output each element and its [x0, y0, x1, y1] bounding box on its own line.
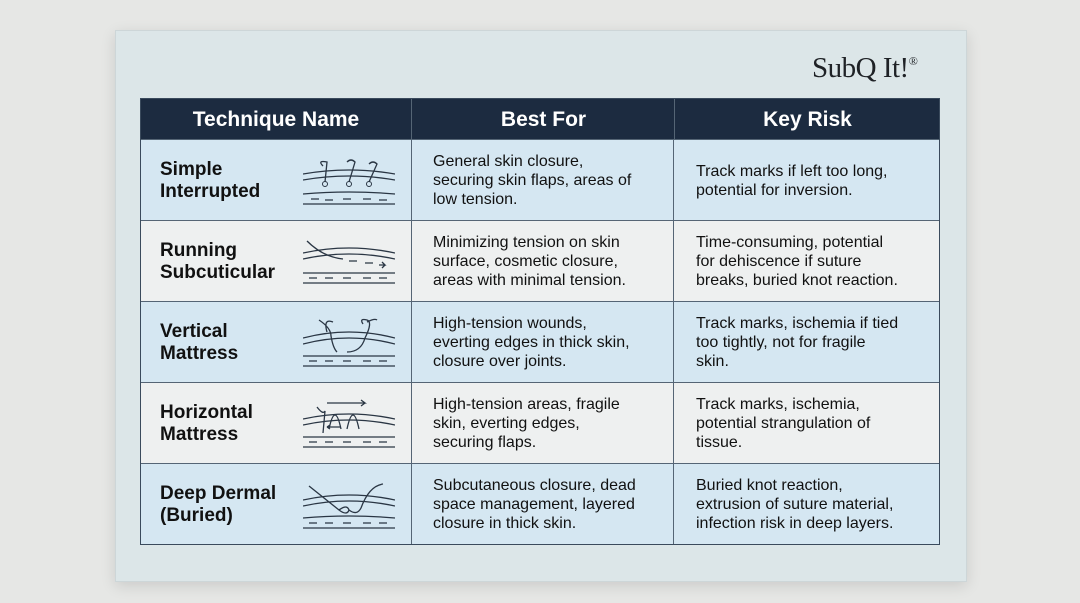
row: horizontal mattress: Mattress	[160, 424, 238, 444]
row: running subcuticular: Subcuticular	[160, 262, 275, 282]
icon: running subcuticular	[303, 240, 395, 284]
row: horizontal mattress: potential strangulation of	[696, 415, 870, 432]
header: best for: Best For	[501, 108, 586, 131]
row: deep dermal: Buried knot reaction,	[696, 477, 843, 494]
icon: deep dermal	[303, 483, 395, 529]
row: simple interrupted: securing skin flaps, areas of	[433, 172, 631, 189]
row: vertical mattress: skin.	[696, 353, 729, 370]
panel: glass board	[115, 30, 967, 582]
table	[140, 98, 940, 545]
row: horizontal mattress: Track marks, ischemia,	[696, 396, 860, 413]
row: vertical mattress: too tightly, not for fragile	[696, 334, 866, 351]
row: deep dermal: Deep Dermal	[160, 482, 276, 504]
row: vertical mattress: Mattress	[160, 342, 238, 364]
row: simple interrupted: potential for inversion.	[696, 182, 853, 198]
row: vertical mattress: High-tension wounds,	[433, 315, 587, 332]
header: technique name	[141, 99, 411, 140]
row: simple interrupted	[141, 139, 939, 221]
header: key risk	[674, 99, 940, 140]
row: horizontal mattress: High-tension areas, fragile	[433, 396, 620, 413]
row: deep dermal	[141, 463, 939, 545]
row: running subcuticular: breaks, buried knot reaction.	[696, 272, 898, 289]
row: deep dermal: Subcutaneous closure, dead	[433, 477, 636, 494]
row: running subcuticular: Minimizing tension on skin	[433, 234, 620, 251]
row: deep dermal: (Buried)	[160, 504, 233, 526]
icon: horizontal mattress	[303, 400, 395, 448]
row: simple interrupted: Interrupted	[160, 180, 260, 202]
header: key risk: Key Risk	[763, 108, 852, 131]
row: vertical mattress: Track marks, ischemia if tied	[696, 315, 898, 332]
row: running subcuticular: areas with minimal tension.	[433, 272, 626, 289]
row: simple interrupted: Track marks if left too long,	[696, 162, 887, 180]
row: vertical mattress: everting edges in thick skin,	[433, 334, 630, 351]
row: running subcuticular: Time-consuming, potential	[696, 234, 883, 251]
logo: SubQ It!®	[812, 52, 917, 84]
header: technique name: Technique Name	[193, 108, 359, 131]
row: horizontal mattress: tissue.	[696, 434, 742, 451]
row: deep dermal: infection risk in deep layers.	[696, 515, 893, 532]
header: best for	[411, 99, 675, 140]
row: vertical mattress: closure over joints.	[433, 353, 566, 370]
row: running subcuticular: surface, cosmetic closure,	[433, 253, 618, 270]
row: running subcuticular	[141, 220, 939, 302]
row: vertical mattress: Vertical	[160, 320, 228, 342]
icon: simple interrupted	[303, 159, 395, 205]
row: simple interrupted: low tension.	[433, 191, 518, 208]
row: vertical mattress	[141, 301, 939, 383]
row: running subcuticular: Running	[160, 240, 237, 260]
row: simple interrupted: Simple	[160, 158, 222, 180]
row: deep dermal: space management, layered	[433, 496, 635, 513]
row: horizontal mattress: Horizontal	[160, 402, 253, 422]
row: horizontal mattress: skin, everting edges,	[433, 415, 580, 432]
row: horizontal mattress	[141, 382, 939, 464]
row: deep dermal: extrusion of suture material,	[696, 496, 893, 513]
row: deep dermal: closure in thick skin.	[433, 515, 576, 532]
row: horizontal mattress: securing flaps.	[433, 434, 536, 451]
row: simple interrupted: General skin closure,	[433, 153, 583, 170]
row: running subcuticular: for dehiscence if suture	[696, 253, 861, 270]
icon: vertical mattress	[303, 318, 395, 367]
